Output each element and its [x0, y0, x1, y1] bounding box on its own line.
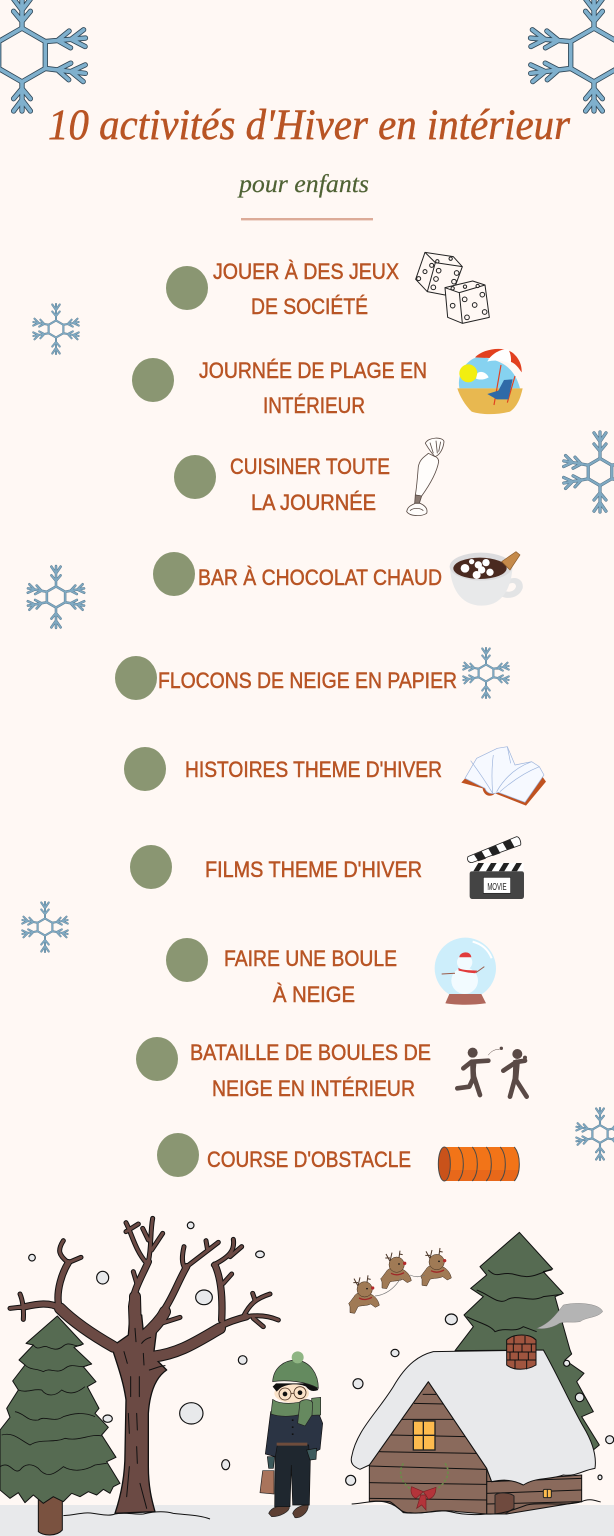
- snowflake: left 1: [33, 304, 79, 354]
- bullet: [166, 938, 208, 982]
- house scene: [346, 1232, 614, 1515]
- activity 4: [153, 552, 523, 606]
- label: JOUER À DES JEUX: [213, 259, 399, 284]
- chimney: [507, 1335, 536, 1369]
- snowflake: left 3: [22, 902, 68, 952]
- icon: clapperboard: MOVIE: [487, 882, 507, 893]
- title divider: [241, 218, 373, 220]
- snowflake: left 2: [27, 566, 85, 628]
- snowflake: right 2: [576, 1108, 614, 1160]
- fir tree: [0, 1316, 120, 1503]
- window: [413, 1421, 435, 1450]
- bullet: [115, 656, 157, 700]
- bullet: [132, 358, 174, 402]
- planks: [369, 1394, 582, 1504]
- activity 1: [166, 252, 489, 323]
- front wall: [369, 1382, 487, 1514]
- snowflake: right 1: [563, 432, 614, 512]
- bullet: [130, 845, 172, 889]
- fir tree branch lines: [0, 1344, 107, 1474]
- smoke: [537, 1303, 603, 1329]
- glasses: [279, 1387, 306, 1400]
- icon: snow globe: [435, 938, 496, 1005]
- activity 2: [132, 349, 523, 418]
- left winter scene: [0, 1218, 278, 1535]
- activity 9: [136, 1037, 527, 1101]
- label: CUISINER TOUTE: [230, 454, 390, 479]
- hat: [273, 1360, 318, 1388]
- label: FAIRE UNE BOULE: [224, 946, 397, 971]
- label: JOURNÉE DE PLAGE EN: [199, 358, 427, 383]
- activity 5: [115, 648, 509, 700]
- icon: beach: [457, 349, 523, 414]
- hair: [273, 1383, 318, 1392]
- bullet: [124, 747, 166, 791]
- icon: dice: [416, 252, 489, 323]
- label: BATAILLE DE BOULES DE: [190, 1040, 431, 1065]
- bullet: [136, 1037, 178, 1081]
- subtitle: pour enfants: [237, 171, 369, 198]
- shopping bag: [260, 1471, 274, 1494]
- label: LA JOURNÉE: [251, 490, 376, 515]
- pompom: [292, 1351, 304, 1363]
- activity 7: [130, 837, 524, 899]
- reindeer right: [421, 1248, 451, 1286]
- reindeer middle: [381, 1251, 411, 1289]
- icon: piping bag: [407, 438, 444, 516]
- door: [495, 1493, 514, 1514]
- bow: [411, 1487, 436, 1510]
- activity 6: [124, 747, 546, 806]
- label: DE SOCIÉTÉ: [251, 294, 368, 319]
- label: HISTOIRES THEME D'HIVER: [185, 757, 442, 782]
- title: 10 activités d'Hiver en intérieur: [48, 102, 570, 149]
- face: [274, 1384, 309, 1403]
- bullet: [157, 1133, 199, 1177]
- label: FLOCONS DE NEIGE EN PAPIER: [158, 668, 457, 693]
- snowflake: top left: [0, 0, 86, 111]
- belt: [277, 1443, 307, 1446]
- label: [230, 454, 390, 515]
- label: [224, 946, 397, 1007]
- background fir tree: [455, 1232, 599, 1450]
- gloves: [267, 1448, 317, 1468]
- label: À NEIGE: [273, 982, 355, 1007]
- fir tree branch lines: [467, 1270, 562, 1332]
- label: COURSE D'OBSTACLE: [207, 1147, 411, 1172]
- fir tree trunk: [38, 1495, 62, 1535]
- icon: snowflake: [463, 648, 509, 698]
- icon: clapperboard: [468, 837, 524, 899]
- shoes: [269, 1505, 308, 1518]
- bullet: [153, 552, 195, 596]
- trousers: [275, 1445, 311, 1507]
- roof snow: [351, 1350, 595, 1485]
- snowflake: top right: [530, 0, 614, 111]
- bare tree: [10, 1218, 278, 1513]
- icon: hot chocolate: [450, 552, 523, 606]
- snowballs: [29, 1222, 264, 1470]
- side wall: [487, 1468, 582, 1514]
- bullet: [166, 266, 208, 310]
- activity 8: [166, 938, 496, 1007]
- snowballs: [346, 1314, 614, 1485]
- label: [213, 259, 399, 319]
- coat buttons: [290, 1419, 295, 1440]
- icon: snowball fight: [457, 1047, 527, 1097]
- icon: open book: [461, 747, 546, 806]
- reindeer left: [349, 1275, 379, 1313]
- bullet: [174, 455, 216, 499]
- activity 10: [157, 1133, 519, 1181]
- boy in winter clothes: [260, 1351, 323, 1518]
- wreath: [401, 1463, 448, 1490]
- label: NEIGE EN INTÉRIEUR: [212, 1076, 415, 1101]
- label: [199, 358, 427, 418]
- snow line: [352, 1500, 601, 1515]
- activity 3: [174, 438, 444, 516]
- scarf: [271, 1397, 321, 1426]
- reindeer harness: [375, 1275, 425, 1296]
- ground snow: [0, 1505, 614, 1536]
- label: INTÉRIEUR: [263, 393, 365, 418]
- label: FILMS THEME D'HIVER: [205, 857, 422, 882]
- label: [190, 1040, 431, 1101]
- coat: [265, 1408, 323, 1457]
- label: BAR À CHOCOLAT CHAUD: [198, 565, 442, 590]
- eyes: [283, 1390, 302, 1396]
- ground line: [63, 1512, 210, 1519]
- icon: orange tunnel: [438, 1147, 519, 1181]
- small window: [543, 1489, 551, 1498]
